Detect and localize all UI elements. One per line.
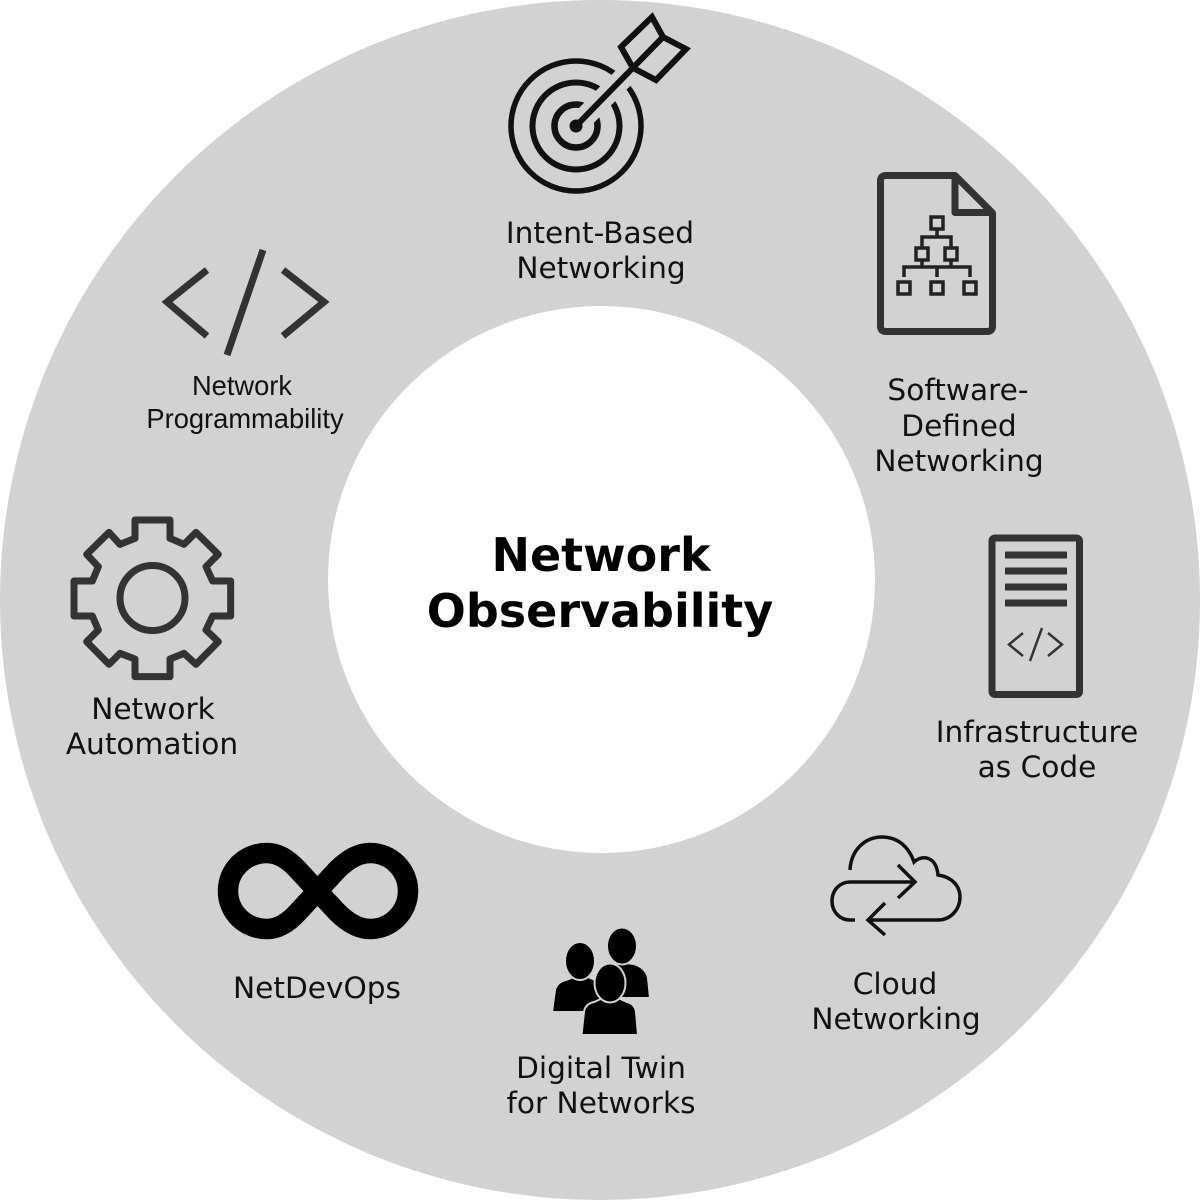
label: Intent-Based Networking: Intent-Based xyxy=(506,216,694,250)
label: Network Programmability: Programmability xyxy=(146,403,344,434)
icon: code brackets xyxy=(167,250,324,355)
label: Cloud Networking xyxy=(811,967,981,1036)
label: Intent-Based Networking xyxy=(506,216,694,285)
label: Software-Defined Networking: Defined xyxy=(901,409,1017,443)
label: Digital Twin for Networks: for Networks xyxy=(506,1086,696,1120)
icon: infinity loop xyxy=(228,853,408,929)
title: Observability xyxy=(427,584,773,638)
label: Network Automation xyxy=(66,692,238,761)
label: NetDevOps: NetDevOps xyxy=(233,971,401,1005)
label: Cloud Networking: Cloud xyxy=(853,967,937,1001)
icon: target with arrow xyxy=(511,17,686,191)
icon: gear xyxy=(74,520,231,677)
label: Network Automation: Network xyxy=(91,692,216,726)
icon: server with code xyxy=(992,538,1080,694)
label: Digital Twin for Networks xyxy=(506,1051,696,1120)
icon: document with hierarchy xyxy=(880,176,992,332)
label: Software-Defined Networking: Software- xyxy=(887,373,1029,407)
label: Intent-Based Networking: Networking xyxy=(516,251,686,285)
icon: cloud with arrows xyxy=(832,837,960,935)
label: Network Programmability xyxy=(146,370,344,434)
icon: group of people xyxy=(552,928,650,1035)
label: Digital Twin for Networks: Digital Twin xyxy=(516,1051,686,1085)
title xyxy=(427,528,773,638)
label: Network Programmability: Network xyxy=(192,370,292,401)
label: Infrastructure as Code xyxy=(936,715,1138,784)
label: Cloud Networking: Networking xyxy=(811,1002,981,1036)
label: Software-Defined Networking xyxy=(874,373,1044,478)
label: Infrastructure as Code: Infrastructure xyxy=(936,715,1138,749)
label: Software-Defined Networking: Networking xyxy=(874,444,1044,478)
title: Network xyxy=(491,528,712,582)
label: Network Automation: Automation xyxy=(66,727,238,761)
label: Infrastructure as Code: as Code xyxy=(978,750,1096,784)
